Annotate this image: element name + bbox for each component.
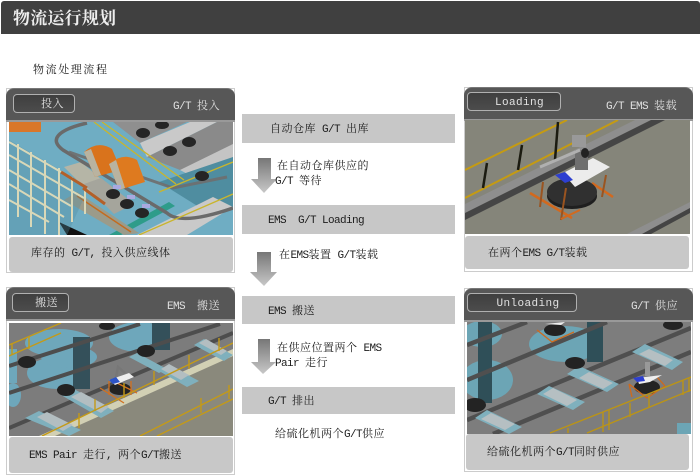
subtitle: 物流处理流程	[33, 65, 109, 77]
panel: unloading	[464, 288, 693, 472]
panel header	[464, 288, 693, 322]
arrow 1	[251, 158, 277, 193]
caption	[9, 237, 233, 272]
panel: transport	[6, 287, 235, 475]
header label: G/T 投入	[173, 101, 220, 113]
step note 1: 在自动仓库供应的 G/T 等待	[275, 161, 369, 188]
tag: transport	[12, 293, 69, 312]
step bar 1: 自动仓库 G/T 出库	[270, 124, 369, 136]
panel header	[6, 88, 235, 122]
caption text: 库存的 G/T, 投入供应线体	[31, 248, 171, 260]
tag: loading	[467, 92, 561, 111]
step note 3: 在供应位置两个 EMS Pair 走行	[275, 343, 382, 370]
step bar 4: G/T 排出	[268, 396, 315, 408]
panel: loading	[464, 87, 693, 272]
step note 4: 给硫化机两个G/T供应	[275, 429, 385, 441]
header label: G/T EMS 装载	[606, 101, 677, 113]
title bar	[1, 1, 700, 34]
step bar 3: EMS 搬送	[268, 306, 315, 318]
header label: EMS 搬送	[167, 301, 220, 313]
arrow 3	[251, 339, 276, 374]
scene: EMS pair transport	[9, 323, 233, 436]
tag: unloading	[467, 293, 577, 312]
step bar 1	[242, 114, 455, 143]
caption	[465, 236, 689, 269]
tag: input	[13, 94, 75, 113]
panel header	[464, 87, 693, 121]
scene: tyre conveyor line	[9, 122, 233, 235]
caption text: 给硫化机两个G/T同时供应	[487, 447, 620, 459]
tag: transport: 搬送	[35, 298, 58, 310]
step bar 2	[242, 205, 455, 234]
caption	[9, 437, 233, 473]
step bar 2: EMS G/T Loading	[268, 215, 364, 227]
caption text: 在两个EMS G/T装载	[488, 248, 588, 260]
step bar 3	[242, 296, 455, 324]
tag: input: 投入	[41, 99, 64, 111]
tag: loading: Loading	[495, 97, 544, 109]
tag: unloading: Unloading	[496, 298, 560, 310]
title bar: 物流运行规划	[13, 9, 116, 28]
panel header	[6, 287, 235, 321]
scene: unloading to curing press	[467, 322, 691, 434]
caption text: EMS Pair 走行, 两个G/T搬送	[29, 450, 182, 462]
step bar 4	[242, 387, 455, 414]
scene: EMS loading	[465, 120, 690, 234]
panel: input	[6, 88, 235, 273]
arrow 2	[250, 252, 277, 286]
header label: G/T 供应	[631, 301, 678, 313]
step note 2: 在EMS装置 G/T装载	[279, 250, 379, 262]
caption	[466, 434, 689, 470]
